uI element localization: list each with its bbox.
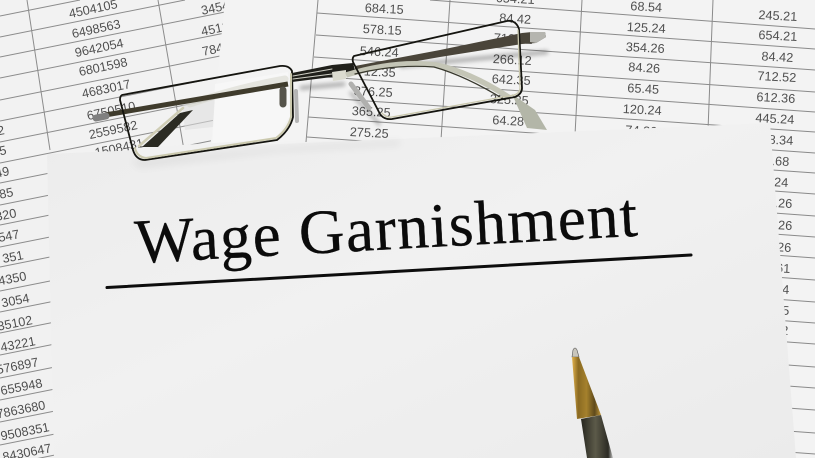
- right spreadsheet numbers, fourth column: 445.24: [755, 111, 795, 127]
- left spreadsheet numbers, second column: 2559582: [88, 118, 139, 142]
- right spreadsheet numbers, third column: 120.24: [622, 102, 662, 118]
- left hinge and nose pad: [283, 90, 297, 121]
- right spreadsheet numbers, third column: 84.26: [628, 60, 660, 76]
- right spreadsheet numbers, fourth column: 245.61: [751, 260, 791, 276]
- right nose pad: [351, 84, 369, 108]
- pen dark barrel: [581, 415, 613, 458]
- glasses shadow on the spreadsheets: [300, 52, 548, 125]
- right lens frame: [353, 21, 522, 119]
- right spreadsheet numbers, second column: 642.35: [491, 72, 531, 88]
- eyeglasses: [96, 21, 547, 160]
- left spreadsheet numbers, first column: 3054: [0, 291, 31, 310]
- ballpoint pen: [572, 348, 613, 458]
- left spreadsheet numbers, second column: 1508431: [94, 136, 145, 160]
- right temple arm: [355, 32, 546, 72]
- left spreadsheet numbers, third column: 7845: [201, 39, 231, 59]
- right spreadsheet numbers, fourth column: 84.42: [761, 49, 794, 65]
- left spreadsheet numbers, first column: 655948: [0, 376, 44, 398]
- right spreadsheet numbers, fourth column: 365.68: [750, 153, 790, 169]
- right spreadsheet numbers, first column: 275.25: [349, 125, 389, 141]
- right spreadsheet numbers, fourth column: 712.52: [749, 322, 789, 338]
- left spreadsheet numbers, second column: 6750510: [86, 99, 137, 123]
- left spreadsheet page: [0, 0, 320, 458]
- earpiece tip: [512, 94, 547, 130]
- right spreadsheet numbers, first column: 578.15: [362, 22, 402, 38]
- bridge between lenses: [292, 63, 355, 82]
- right spreadsheet numbers, fourth column: 654.24: [750, 281, 790, 297]
- right spreadsheet numbers, second column: [489, 0, 535, 129]
- far temple arm seen through left lens: [139, 79, 285, 147]
- right spreadsheet numbers, first column: 546.24: [359, 44, 399, 60]
- right spreadsheet numbers, second column: 64.28: [492, 113, 524, 129]
- left spreadsheet numbers, first column: 9508351: [0, 420, 51, 443]
- right spreadsheet numbers, third column: [622, 0, 666, 139]
- right spreadsheet numbers, fourth column: 612.36: [756, 90, 796, 106]
- left lens frame: [120, 66, 293, 160]
- right spreadsheet numbers, first column: [349, 1, 404, 141]
- left spreadsheet numbers, second column: [68, 0, 145, 160]
- right spreadsheet numbers, second column: 266.12: [492, 52, 532, 68]
- right spreadsheet numbers, third column: 354.26: [625, 40, 665, 56]
- far temple arm right side: [346, 64, 510, 100]
- middle blank sheet and right spreadsheet page: [210, 0, 815, 458]
- left spreadsheet numbers, second column: 4683017: [81, 77, 132, 101]
- right spreadsheet numbers, fourth column: 84.25: [757, 302, 790, 318]
- right spreadsheet numbers, second column: 84.42: [499, 11, 531, 27]
- right spreadsheet numbers, first column: 712.35: [356, 64, 396, 80]
- right spreadsheet numbers, fourth column: 245.21: [758, 8, 798, 24]
- right spreadsheet numbers, fourth column: 326.26: [753, 217, 793, 233]
- right spreadsheet numbers, first column: 365.25: [351, 104, 391, 120]
- right spreadsheet numbers, third column: 65.45: [627, 81, 659, 97]
- document title: Wage Garnishment: [133, 180, 640, 277]
- left spreadsheet numbers, second column: 6801598: [78, 55, 129, 79]
- soft shadow cast on the sheet by the glasses: [130, 140, 400, 168]
- main document sheet: [47, 123, 796, 458]
- left spreadsheet numbers, first column: 351: [1, 248, 25, 266]
- right spreadsheet numbers, fourth column: 712.52: [757, 69, 797, 85]
- left spreadsheet numbers, first column: 43221: [0, 334, 37, 355]
- right spreadsheet numbers, first column: 684.15: [364, 1, 404, 17]
- near temple arm left side: [96, 84, 288, 118]
- left spreadsheet numbers, third column: 4512: [200, 19, 230, 39]
- left spreadsheet numbers, second column: 6498563: [71, 17, 122, 41]
- left spreadsheet numbers, third column: [200, 0, 231, 59]
- right spreadsheet numbers, fourth column: 125.26: [753, 195, 793, 211]
- right spreadsheet numbers, second column: 325.25: [489, 92, 529, 108]
- left spreadsheet numbers, second column: 9642054: [74, 36, 125, 60]
- pen tip: [572, 348, 579, 357]
- right spreadsheet numbers, second column: 712.52: [493, 31, 533, 47]
- right spreadsheet numbers, fourth column: 654.21: [758, 28, 798, 44]
- left spreadsheet numbers, first column: [0, 123, 53, 458]
- right spreadsheet numbers, third column: 125.24: [626, 20, 666, 36]
- pen gold cone: [572, 357, 601, 419]
- right spreadsheet numbers, first column: 376.25: [353, 84, 393, 100]
- right spreadsheet numbers, fourth column: 128.34: [754, 132, 794, 148]
- right spreadsheet numbers, third column: 74.26: [625, 123, 657, 139]
- title underline: [107, 255, 691, 288]
- right spreadsheet numbers, fourth column: 426.26: [752, 239, 792, 255]
- right spreadsheet numbers, fourth column: 274.24: [749, 174, 789, 190]
- left lens interior: bright paper and refracted sheet edge: [134, 72, 290, 157]
- right spreadsheet numbers, fourth column: [749, 8, 798, 338]
